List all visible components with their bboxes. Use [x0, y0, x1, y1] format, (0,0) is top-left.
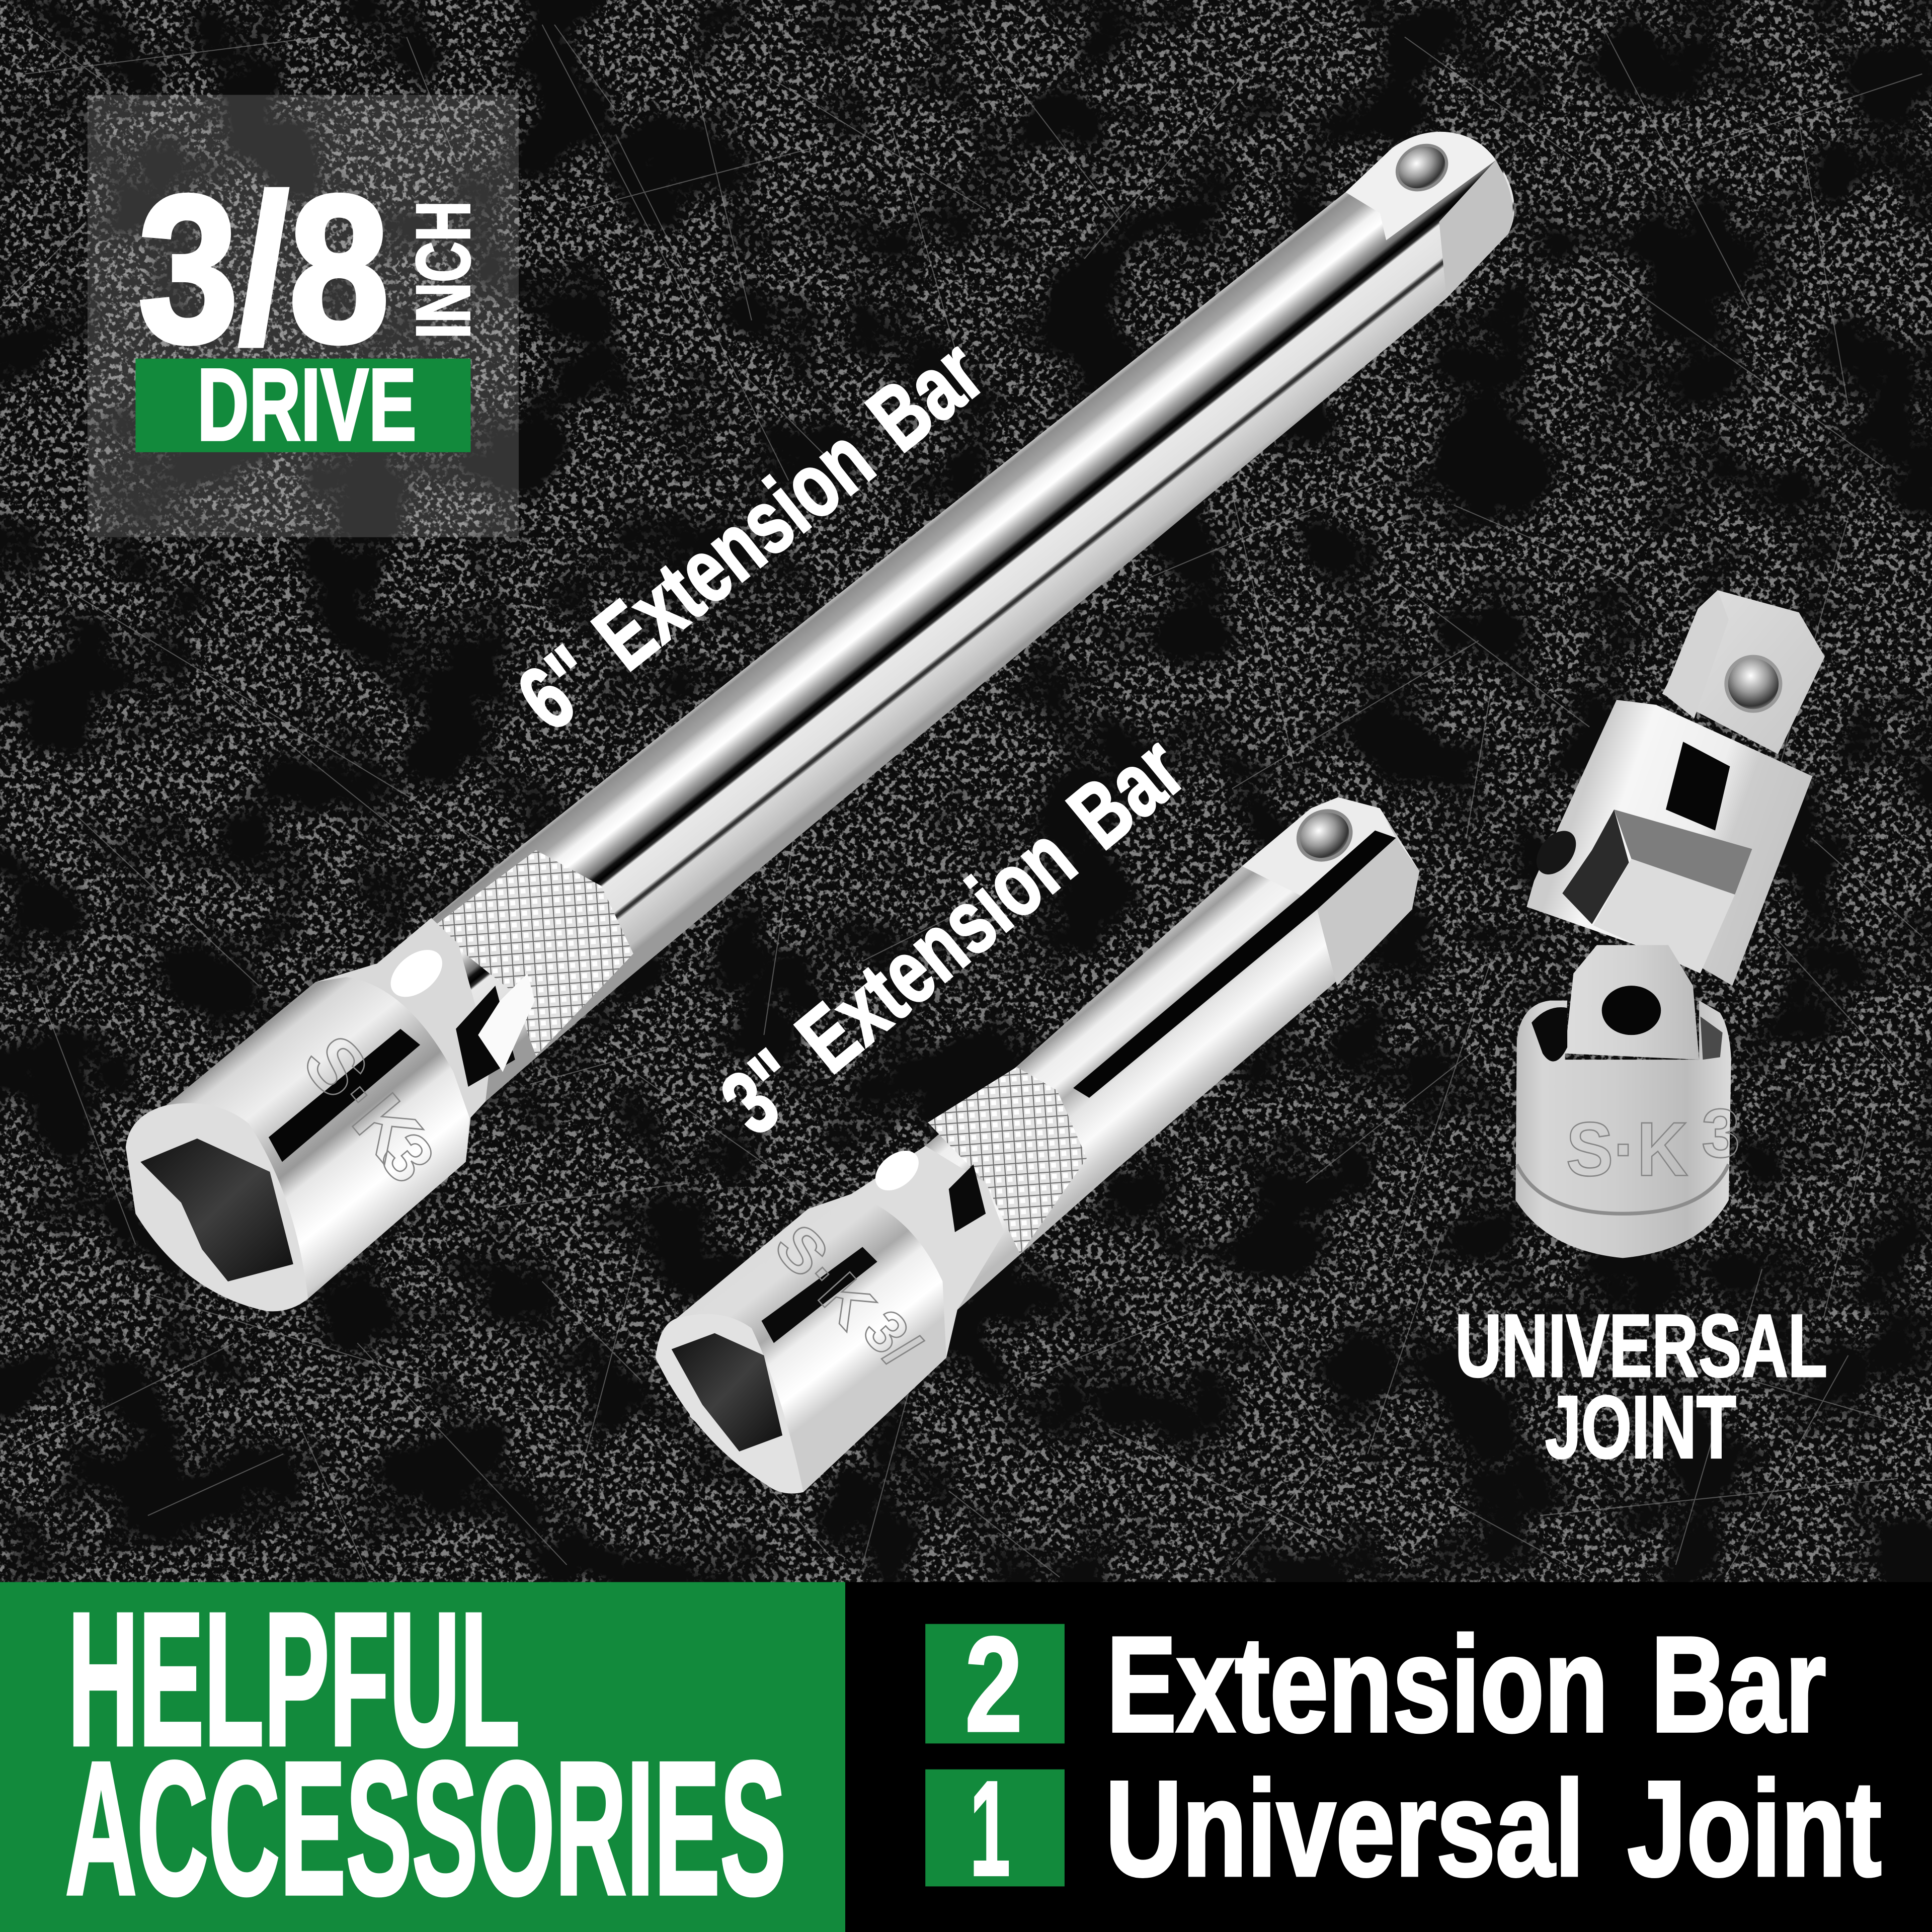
socket body [167, 977, 469, 1311]
left cutout [1532, 1007, 1567, 1062]
knurled grip [928, 1067, 1087, 1254]
size numeral: 3/ [851, 1298, 933, 1378]
quantity box 2: 2 [965, 1609, 1023, 1760]
socket hex opening [672, 1333, 782, 1452]
drive facet [1663, 590, 1729, 718]
shaft [370, 132, 1514, 1101]
heading: ACCESSORIES [65, 1722, 786, 1932]
3/8 numeral: 3/8 [138, 152, 389, 386]
detent ball [1389, 136, 1455, 199]
3 inch extension bar [656, 797, 1419, 1494]
size numeral: 3 [1702, 1095, 1740, 1172]
neck highlight [382, 940, 451, 1006]
socket hex opening [140, 1139, 293, 1281]
socket dark reflection [761, 1247, 877, 1343]
drive head [1242, 797, 1396, 896]
detent ball [1726, 657, 1781, 711]
heading: HELPFUL [68, 1573, 520, 1785]
neck [851, 1146, 1004, 1358]
end face [1317, 838, 1419, 986]
socket face rim [126, 1103, 308, 1311]
universal joint label [1455, 1297, 1827, 1477]
knurled grip [435, 850, 633, 1056]
panel: drive size badge [88, 95, 519, 537]
quantity box 1: 1 [970, 1753, 1010, 1904]
upper yoke [1526, 700, 1812, 986]
neck shadow [949, 1164, 986, 1232]
yoke dark reflection [1666, 742, 1730, 831]
dark slit [1073, 831, 1396, 1098]
quantity box 2 [925, 1609, 1065, 1760]
drive green bar [135, 359, 471, 452]
S K engraving: S·K [762, 1211, 889, 1341]
socket body [676, 1194, 946, 1492]
socket dark reflection [269, 1029, 420, 1162]
neck [315, 918, 491, 1208]
cross pin hole [1602, 986, 1661, 1035]
S K engraving: S·K [1566, 1107, 1688, 1192]
yoke side hole [1528, 823, 1584, 882]
lower fork tongue [1565, 945, 1699, 1060]
square drive [1662, 590, 1825, 754]
detent ball [1290, 801, 1360, 869]
6 inch label: 6" Extension Bar [500, 320, 1001, 750]
cross block front [1593, 859, 1735, 974]
universal joint [1515, 590, 1825, 1258]
quantity box 1 [925, 1753, 1065, 1904]
shaft [851, 797, 1419, 1310]
3 inch label: 3" Extension Bar [703, 717, 1202, 1154]
neck light patch [478, 974, 535, 1072]
socket face rim [656, 1314, 803, 1494]
socket body [1515, 1001, 1731, 1258]
fork shadow [1562, 810, 1629, 924]
panel: helpful accessories [0, 1573, 845, 1932]
panel: contents list [845, 1582, 1932, 1932]
neck highlight [868, 1143, 926, 1198]
collar band [1517, 1164, 1729, 1214]
universal joint label: JOINT [1545, 1378, 1736, 1477]
S K engraving: S·K [287, 1019, 437, 1176]
drive head [1345, 132, 1496, 240]
heading [65, 1573, 786, 1932]
end face [1439, 160, 1513, 298]
right cutout [1701, 1016, 1723, 1060]
neck shadow [456, 986, 515, 1087]
size numeral: 3 [365, 1118, 449, 1197]
6 inch extension bar [126, 132, 1514, 1311]
cross block top [1614, 810, 1752, 895]
DRIVE label: DRIVE [197, 348, 417, 462]
INCH vertical label: INCH [401, 201, 486, 339]
